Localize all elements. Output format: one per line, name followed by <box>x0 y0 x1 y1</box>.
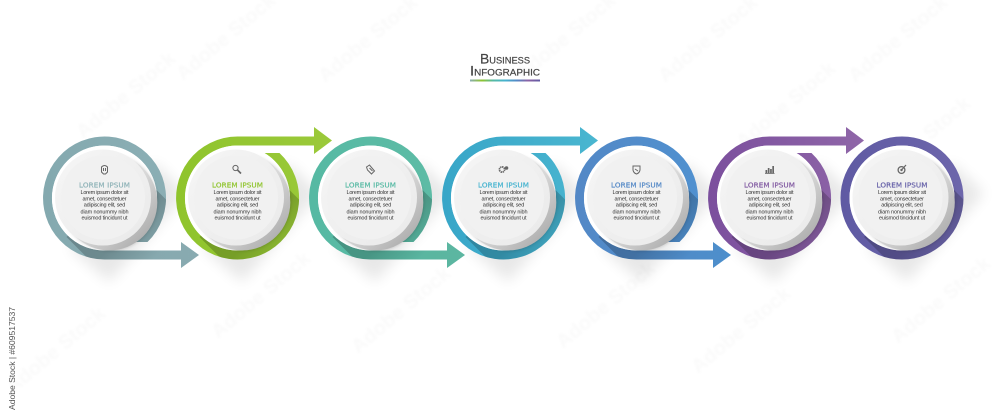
text block: euismod tincidunt ut <box>480 216 527 222</box>
text block <box>612 190 661 222</box>
text block: diam nonummy nibh <box>480 209 528 215</box>
watermarks: Adobe Stock <box>207 247 316 343</box>
text block: amet, consectetuer <box>82 196 127 202</box>
text block <box>80 190 129 222</box>
text block: adipiscing elit, sed <box>483 203 524 209</box>
step 4 <box>442 127 598 280</box>
text block: amet, consectetuer <box>614 196 659 202</box>
icon: target <box>898 165 906 173</box>
text block: diam nonummy nibh <box>878 209 926 215</box>
heading: LOREM IPSUM <box>212 180 263 190</box>
icon: handshake <box>366 165 374 174</box>
text block <box>878 190 926 222</box>
icon: bar chart <box>765 166 774 174</box>
text block: adipiscing elit, sed <box>84 203 125 209</box>
heading: LOREM IPSUM <box>744 180 795 190</box>
title <box>470 52 541 82</box>
icon: gears <box>499 167 508 172</box>
text block: diam nonummy nibh <box>612 209 660 215</box>
text block: Lorem ipsum dolor sit <box>612 190 661 196</box>
text block: adipiscing elit, sed <box>350 203 391 209</box>
watermarks: Adobe Stock <box>732 57 841 153</box>
text block: amet, consectetuer <box>482 196 526 202</box>
text block: euismod tincidunt ut <box>82 216 128 222</box>
icon: hand <box>102 166 108 174</box>
text block: Lorem ipsum dolor sit <box>346 190 395 196</box>
watermarks: Adobe Stock <box>347 262 456 358</box>
heading: LOREM IPSUM <box>478 180 529 190</box>
text block: diam nonummy nibh <box>746 209 794 215</box>
step 3 <box>309 136 465 280</box>
icon: magnifier <box>233 165 241 174</box>
watermarks: Adobe Stock <box>687 282 796 378</box>
watermarks: Adobe Stock <box>2 302 111 398</box>
title: Infographic <box>470 64 541 78</box>
text block: amet, consectetuer <box>216 196 260 202</box>
step 6 <box>708 127 864 280</box>
icon: shield <box>633 166 640 174</box>
text block <box>346 190 395 222</box>
text block: Lorem ipsum dolor sit <box>80 190 129 196</box>
step 5 <box>575 136 731 280</box>
step 1 <box>43 136 199 280</box>
heading: LOREM IPSUM <box>79 180 130 190</box>
text block: Lorem ipsum dolor sit <box>214 190 262 196</box>
step 2 <box>176 127 332 280</box>
step 7 <box>840 136 982 280</box>
text block: adipiscing elit, sed <box>217 203 258 209</box>
text block: euismod tincidunt ut <box>879 216 925 222</box>
text block: diam nonummy nibh <box>80 209 128 215</box>
text block: Lorem ipsum dolor sit <box>878 190 926 196</box>
watermarks: Adobe Stock <box>867 92 976 188</box>
heading: LOREM IPSUM <box>611 180 662 190</box>
text block: amet, consectetuer <box>880 196 924 202</box>
side credit: Adobe Stock | #609517537 <box>7 307 17 410</box>
text block: amet, consectetuer <box>748 196 792 202</box>
watermarks: Adobe Stock <box>552 257 661 353</box>
text block: Lorem ipsum dolor sit <box>746 190 794 196</box>
heading: LOREM IPSUM <box>345 180 396 190</box>
text block: diam nonummy nibh <box>214 209 262 215</box>
text block <box>480 190 528 222</box>
text block: amet, consectetuer <box>348 196 393 202</box>
text block: adipiscing elit, sed <box>749 203 790 209</box>
text block: euismod tincidunt ut <box>214 216 261 222</box>
watermarks: Adobe Stock <box>72 47 181 143</box>
text block: adipiscing elit, sed <box>616 203 657 209</box>
text block <box>214 190 262 222</box>
watermarks: Adobe Stock <box>887 252 996 348</box>
text block <box>746 190 794 222</box>
text block: euismod tincidunt ut <box>746 216 793 222</box>
text block: diam nonummy nibh <box>346 209 394 215</box>
text block: euismod tincidunt ut <box>614 216 660 222</box>
heading: LOREM IPSUM <box>876 180 928 190</box>
title: Business <box>480 52 530 66</box>
text block: Lorem ipsum dolor sit <box>480 190 528 196</box>
text block: adipiscing elit, sed <box>881 203 923 209</box>
text block: euismod tincidunt ut <box>348 216 394 222</box>
